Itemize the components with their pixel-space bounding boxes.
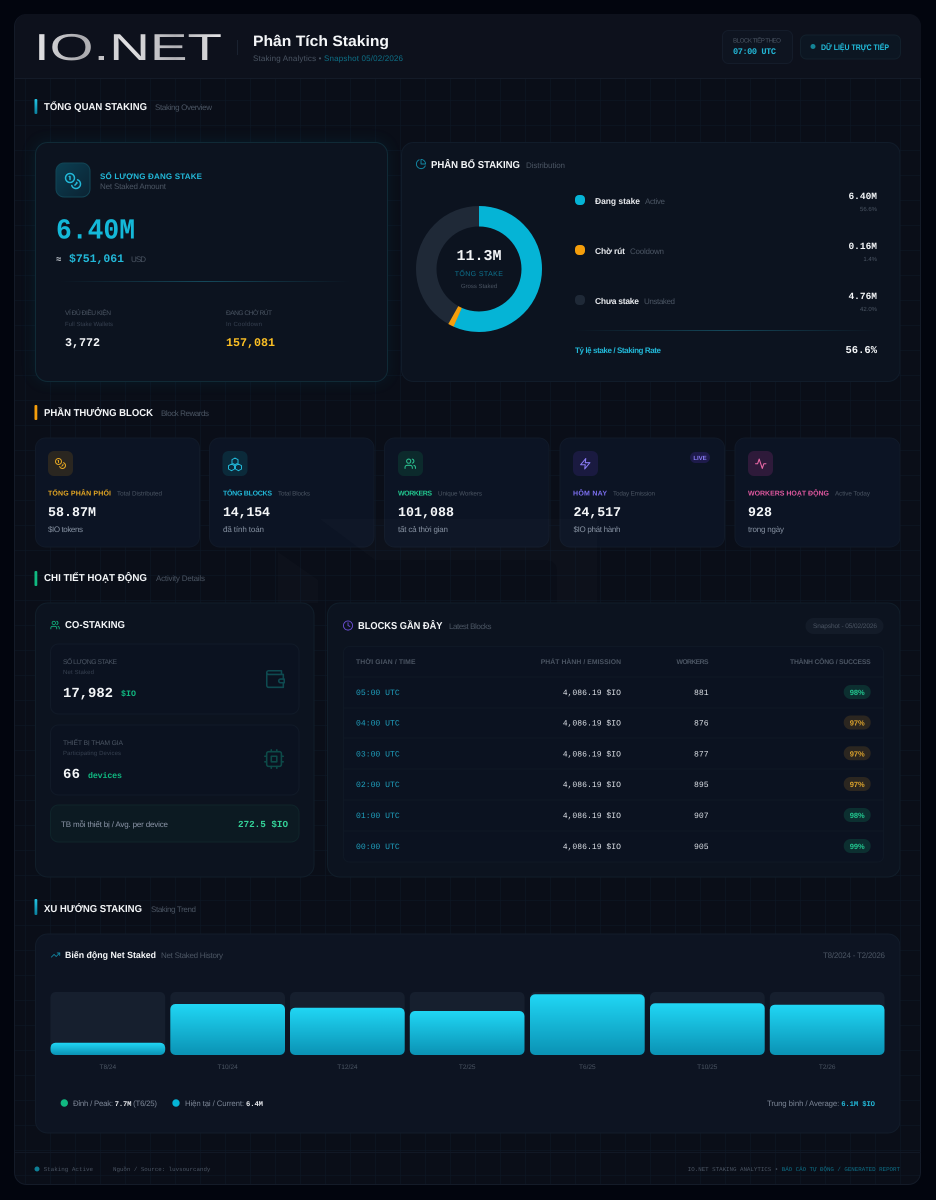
bar chart: T12/24 [337,1064,358,1071]
stat: participating devices: 66 [63,767,80,783]
usd value: $751,061 [69,253,124,266]
stat: average per device: 272.5 $IO [238,819,288,830]
header title: Phân Tích Staking [253,33,389,50]
card: active workers: trong ngày [748,525,784,534]
legend: unstaked: 4.76M [848,291,877,302]
row 02:00: 895 [694,781,709,790]
donut chart [409,199,549,339]
row 01:00: 4,086.19 $IO [563,812,621,821]
chart heading: Biến động Net Staked [65,950,156,960]
row 05:00: 05:00 UTC [356,689,400,698]
row 03:00: 03:00 UTC [356,750,400,759]
card: unique workers: WORKERS [398,490,432,498]
table header [356,657,871,666]
legend: unstaked [575,291,878,313]
stat: full stake wallets: 3,772 [65,336,100,350]
row 00:00: 905 [694,843,709,852]
row 03:00 [356,746,871,760]
card: total blocks [210,438,374,547]
legend: unstaked: Chưa stake [595,296,639,306]
stat: average per device [50,805,299,842]
row 04:00 [356,716,871,730]
legend: cooldown: Cooldown [630,247,664,256]
card: today emission: 24,517 [574,505,621,520]
card: total blocks: đã tính toán [223,525,264,534]
card: today emission: $IO phát hành [574,525,620,534]
next block badge: 07:00 UTC [733,47,776,57]
card: total distributed: Total Distributed [117,490,162,498]
row 04:00: 04:00 UTC [356,720,400,728]
stat: in cooldown [226,309,275,350]
live data badge [800,35,900,59]
legend: cooldown [575,241,878,263]
legend: peak: Đỉnh / Peak: 7.7M (T6/25) [73,1099,157,1109]
stat: in cooldown: In Cooldown [226,321,262,328]
bar chart: T10/25 [697,1064,718,1071]
legend: current: Hiện tại / Current: 6.4M [185,1099,263,1109]
section heading: staking overview: Staking Overview [155,103,212,112]
row 03:00: 4,086.19 $IO [563,750,621,759]
card: total blocks: 14,154 [223,505,270,520]
card: active workers: 928 [748,505,772,520]
legend: cooldown: 1.4% [863,256,878,263]
stat: net staked: 17,982 [63,686,113,702]
section heading: staking trend: XU HƯỚNG STAKING [44,903,142,915]
live tag: LIVE [693,455,707,462]
card: unique workers: 101,088 [398,505,454,520]
legend: active [575,191,878,213]
usd value: ≈ [56,255,61,265]
donut chart: TỔNG STAKE [455,269,503,278]
footer status: Staking Active [44,1166,94,1173]
stat: net staked: SỐ LƯỢNG STAKE [63,657,117,666]
row 05:00: 4,086.19 $IO [563,689,621,698]
section heading: activity details: CHI TIẾT HOẠT ĐỘNG [44,572,147,584]
section heading: activity details [34,571,205,586]
stat: participating devices: Participating Devices [63,750,121,757]
card: today emission: Today Emission [613,490,655,498]
bar chart: T6/25 [579,1064,596,1071]
panel heading: CO-STAKING [65,620,125,631]
card: total distributed: TỔNG PHÂN PHỐI [48,488,111,498]
header subtitle: Staking Analytics • Snapshot 05/02/2026 [253,54,404,63]
card: total blocks: Total Blocks [278,490,310,498]
row 05:00: 98% [850,688,865,697]
footer source: Nguồn / Source: luvsourcandy [113,1166,211,1173]
panel: net staked history: Net Staked History [161,951,223,960]
section heading: block rewards: Block Rewards [161,409,209,418]
row 04:00: 97% [850,718,865,728]
staking rate: 56.6% [845,345,878,357]
logo: IO.NET: IO.NET [34,26,222,68]
panel heading: BLOCKS GẦN ĐÂY [358,620,443,632]
footer report label: IO.NET STAKING ANALYTICS • BÁO CÁO TỰ ĐỘNG / GENERATED REPORT [688,1166,901,1173]
row 01:00: 907 [694,812,709,821]
stat: net staked: Net Staked [63,669,94,676]
row 01:00: 01:00 UTC [356,812,400,821]
header bar [15,14,921,78]
card: today emission: HÔM NAY [573,488,607,498]
stat: in cooldown: ĐANG CHỜ RÚT [226,309,272,317]
staking rate [575,345,878,357]
stat: full stake wallets [65,309,113,350]
legend: active: 56.6% [860,206,878,213]
section heading: block rewards: PHẦN THƯỞNG BLOCK [44,407,154,419]
legend: cooldown: 0.16M [848,241,877,252]
label: SỐ LƯỢNG ĐANG STAKE [100,171,203,181]
icon: clock [343,621,353,630]
next block badge [722,30,792,64]
section heading: activity details: Activity Details [156,574,205,583]
panel heading: PHÂN BỔ STAKING [431,159,520,171]
watermark logo [278,519,597,603]
blocks table [344,646,884,862]
table header: WORKERS [676,659,709,666]
row 03:00: 97% [850,749,865,758]
snapshot tag [806,618,884,634]
bar chart: T10/24 [217,1064,238,1071]
card: active workers: WORKERS HOẠT ĐỘNG [748,488,830,498]
live tag [690,452,710,463]
row 04:00: 4,086.19 $IO [563,720,621,728]
row 00:00: 99% [850,842,865,851]
row 02:00: 97% [850,780,865,789]
panel: co-staking [36,603,314,877]
section heading: staking overview [34,99,212,114]
row 02:00: 4,086.19 $IO [563,781,621,790]
stat: full stake wallets: VÍ ĐỦ ĐIỀU KIỆN [65,309,111,317]
legend: unstaked: Unstaked [644,297,675,306]
stat: full stake wallets: Full Stake Wallets [65,321,113,328]
table header: THÀNH CÔNG / SUCCESS [790,657,871,666]
bar chart: T2/25 [459,1064,476,1071]
stat: average per device: TB mỗi thiết bị / Avg. per device [61,820,169,829]
row 01:00 [356,808,871,822]
legend: active: Đang stake [595,196,640,206]
stat: net staked: $IO [121,689,136,699]
card: active workers: Active Today [835,490,871,498]
table header: PHÁT HÀNH / EMISSION [541,657,621,666]
row 02:00: 02:00 UTC [356,781,400,790]
staking rate: Tỷ lệ stake / Staking Rate [575,346,662,355]
bar chart [50,992,884,1071]
card: unique workers: Unique Workers [438,490,482,498]
card: active workers [735,438,900,547]
icon: users [51,621,59,629]
usd value [56,253,146,266]
row 01:00: 98% [850,811,865,820]
row 04:00: 876 [694,720,709,728]
panel: latest blocks [328,603,900,877]
panel: net staked amount [35,142,388,382]
icon: coins [56,163,90,197]
legend: active: Active [645,197,666,206]
date range: T8/2024 - T2/2026 [823,951,886,960]
section heading: staking trend [34,899,196,915]
row 05:00 [356,685,871,699]
icon: trending up [51,953,60,957]
section heading: staking trend: Staking Trend [151,905,196,914]
row 05:00: 881 [694,689,709,698]
row 00:00 [356,839,871,853]
card: total distributed: 58.87M [48,505,96,520]
bar chart: T8/24 [99,1064,116,1071]
card: unique workers: tất cả thời gian [398,525,448,534]
section heading: block rewards [34,405,209,420]
row 00:00: 00:00 UTC [356,843,400,852]
card: total blocks: TỔNG BLOCKS [223,488,272,498]
section heading: staking overview: TỔNG QUAN STAKING [44,101,147,113]
row 03:00: 877 [694,750,709,759]
icon: pie chart [416,159,426,169]
legend: cooldown: Chờ rút [595,246,625,256]
card: unique workers [384,438,549,547]
panel: staking distribution [402,142,900,382]
next block badge: BLOCK TIẾP THEO [733,36,781,44]
panel: latest blocks: Latest Blocks [449,622,492,631]
live data badge: DỮ LIỆU TRỰC TIẾP [821,42,890,52]
main value: 6.40M [56,214,135,248]
panel: net staked history [36,934,900,1133]
legend: active: 6.40M [848,191,877,202]
card: today emission [560,438,724,547]
panel: net staked amount: Net Staked Amount [100,182,167,191]
donut chart: Gross Staked [461,283,497,290]
legend: unstaked: 42.0% [860,306,878,313]
card: total distributed: $IO tokens [48,525,83,534]
card: total distributed [36,438,200,547]
stat: participating devices [50,725,299,795]
donut chart: 11.3M [456,248,502,265]
row 00:00: 4,086.19 $IO [563,843,621,852]
snapshot tag: Snapshot - 05/02/2026 [813,623,877,630]
bar chart: T2/26 [819,1064,836,1071]
usd value: USD [131,255,146,264]
table header: THỜI GIAN / TIME [356,657,416,666]
footer [15,1152,921,1173]
panel: staking distribution: Distribution [526,161,565,170]
stat: participating devices: devices [88,771,122,781]
stat: in cooldown: 157,081 [226,336,275,350]
row 02:00 [356,777,871,791]
average: Trung bình / Average: 6.1M $IO [767,1099,876,1109]
stat: net staked [50,644,299,714]
stat: participating devices: THIẾT BỊ THAM GIA [63,738,123,747]
